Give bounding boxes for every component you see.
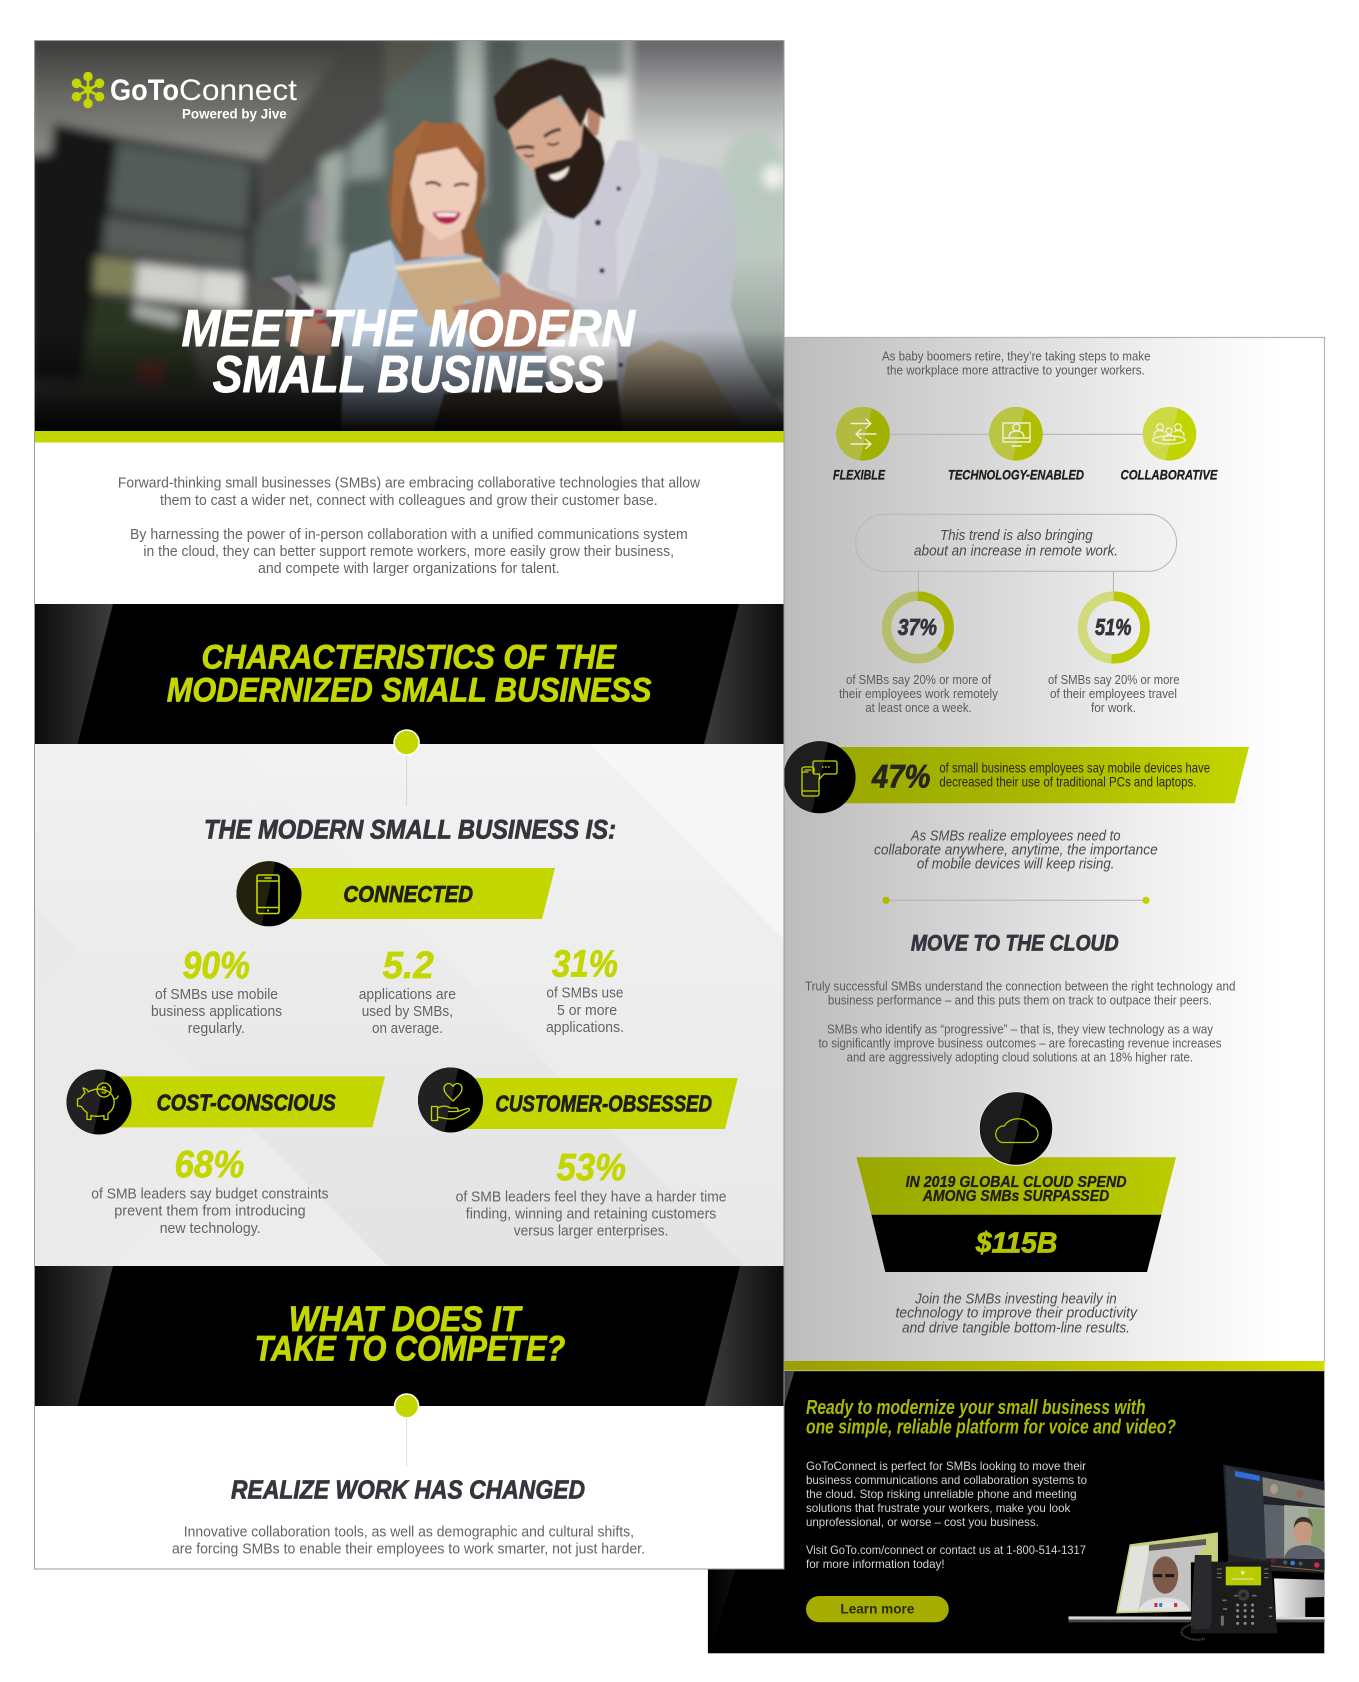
icon: smartphone xyxy=(236,861,302,926)
text: introduction: in the cloud, they can better support remote workers, more easily grow their business, xyxy=(143,543,674,560)
stat: 5.2: applications are xyxy=(359,986,456,1003)
stat: 5.2: on average. xyxy=(372,1020,443,1037)
stat: 5.2: used by SMBs, xyxy=(362,1003,453,1020)
divider with dots xyxy=(882,897,1150,904)
icon: collaborative xyxy=(1142,407,1196,461)
text: call to action body: unprofessional, or worse – cost you business. xyxy=(806,1515,1039,1529)
woman hair xyxy=(387,123,487,262)
chart: 51% donut xyxy=(1082,571,1145,659)
accent bar: right column xyxy=(783,1361,1324,1371)
logo: GoToConnect: Powered by Jive xyxy=(182,105,287,121)
illustration: monitor, laptop and desk phone xyxy=(1068,1464,1330,1640)
icon: hand holding heart xyxy=(418,1068,483,1132)
heading: move to the cloud: MOVE TO THE CLOUD xyxy=(911,931,1119,956)
text: join the SMBs: and drive tangible bottom-line results. xyxy=(902,1320,1130,1337)
icon: technology-enabled xyxy=(989,407,1043,461)
stat: 31%: 31% xyxy=(552,944,618,986)
stat: 31%: applications. xyxy=(546,1019,624,1036)
labels: workplace traits: FLEXIBLE xyxy=(833,467,886,482)
stat: 2019 cloud spend: $115B xyxy=(975,1228,1057,1260)
intro text: baby boomers: As baby boomers retire, they’re taking steps to make xyxy=(882,350,1151,364)
text: 37% caption: at least once a week. xyxy=(865,701,972,715)
text: 37% caption: of SMBs say 20% or more of xyxy=(846,673,991,687)
stat: 90%: of SMBs use mobile xyxy=(155,986,278,1003)
photo: blurred office background xyxy=(27,33,791,453)
banner: 47% mobile devices xyxy=(784,741,1249,814)
text: introduction: and compete with larger organizations for talent. xyxy=(258,560,560,577)
text: introduction xyxy=(118,474,700,577)
heading: the modern small business is: THE MODERN SMALL BUSINESS IS: xyxy=(204,815,616,845)
stat: 68%: 68% xyxy=(174,1144,244,1186)
banner: cost-conscious: COST-CONSCIOUS xyxy=(157,1090,336,1116)
banner: cost-conscious xyxy=(66,1070,385,1134)
banner: 47% mobile devices: of small business employees say mobile devices have xyxy=(939,760,1210,776)
man jacket xyxy=(527,158,784,422)
text: cloud paragraphs: Truly successful SMBs understand the connection between the right technology and xyxy=(805,980,1235,994)
stat: 53%: versus larger enterprises. xyxy=(514,1222,668,1240)
text: introduction: By harnessing the power of in-person collaboration with a unified communications system xyxy=(130,526,688,543)
stat: 68%: new technology. xyxy=(160,1220,261,1237)
text: realize work has changed: Innovative collaboration tools, as well as demographic and cultural shifts, xyxy=(184,1524,634,1541)
text: 51% caption xyxy=(1048,673,1180,715)
text: call to action body: business communications and collaboration systems to xyxy=(806,1473,1087,1487)
tablet xyxy=(394,258,508,327)
labels: workplace traits: COLLABORATIVE xyxy=(1120,467,1218,482)
stat: 5.2: 5.2 xyxy=(383,945,434,987)
text: 37% caption: their employees work remotely xyxy=(839,687,999,701)
chart: 37% donut: 37% xyxy=(898,614,937,640)
diagram: three workplace traits xyxy=(836,407,1196,461)
text: introduction: Forward-thinking small businesses (SMBs) are embracing collaborative technologies that allow xyxy=(118,474,700,492)
labels: workplace traits xyxy=(833,467,1218,482)
banner: characteristics heading: CHARACTERISTICS OF THE xyxy=(202,639,617,677)
callout: remote work trend: This trend is also bringing xyxy=(940,527,1093,544)
man trousers xyxy=(620,340,734,418)
text: cloud paragraphs: and are aggressively adopting cloud solutions at an 18% higher rate. xyxy=(847,1051,1193,1065)
panel: right column background xyxy=(783,338,1324,1362)
man hand xyxy=(452,273,576,352)
text: 51% caption: of their employees travel xyxy=(1050,687,1177,701)
text: cloud paragraphs: to significantly improve business outcomes – are forecasting revenue increases xyxy=(818,1037,1222,1051)
stat: 31% xyxy=(546,944,624,1036)
text: mobile devices statement: As SMBs realize employees need to xyxy=(910,828,1120,845)
button: learn more xyxy=(806,1596,949,1622)
stat: 90%: business applications xyxy=(151,1003,282,1020)
accent bar: hero xyxy=(34,431,784,442)
icon: piggy bank: $ xyxy=(101,1086,107,1096)
banner: characteristics heading xyxy=(34,604,784,744)
photo: dark gradient overlay xyxy=(34,40,784,432)
text: cloud paragraphs xyxy=(805,980,1235,1065)
panel: hero photo xyxy=(27,33,794,453)
stat: 53% xyxy=(456,1147,726,1240)
stat: 90% xyxy=(151,945,282,1037)
banner: what does it take to compete: TAKE TO COMPETE? xyxy=(255,1330,565,1369)
stat: 53%: finding, winning and retaining customers xyxy=(466,1206,716,1222)
banner: customer-obsessed: CUSTOMER-OBSESSED xyxy=(495,1090,712,1116)
banner: customer-obsessed xyxy=(418,1068,738,1132)
intro text: baby boomers xyxy=(882,350,1151,378)
title: SMALL BUSINESS xyxy=(213,346,605,404)
stat: 2019 cloud spend xyxy=(856,1085,1176,1272)
chart: 51% donut: 51% xyxy=(1095,614,1131,640)
text: call to action body: the cloud. Stop risking unreliable phone and meeting xyxy=(806,1487,1077,1501)
panel: left column white background xyxy=(34,40,784,1569)
stat: 90%: regularly. xyxy=(188,1020,245,1037)
text: join the SMBs: technology to improve their productivity xyxy=(896,1305,1138,1322)
stat: 68%: of SMB leaders say budget constraints xyxy=(91,1186,329,1202)
text: mobile devices statement: collaborate anywhere, anytime, the importance xyxy=(874,842,1158,859)
text: 51% caption: of SMBs say 20% or more xyxy=(1048,673,1180,687)
banner: connected xyxy=(236,861,555,926)
panel: call to action xyxy=(708,1371,1330,1654)
man hair, face and beard xyxy=(507,95,592,183)
text: introduction: them to cast a wider net, connect with colleagues and grow their customer base. xyxy=(160,492,658,509)
text: 37% caption xyxy=(839,673,999,715)
intro text: baby boomers: the workplace more attractive to younger workers. xyxy=(887,364,1145,378)
banner: what does it take to compete: WHAT DOES IT xyxy=(289,1300,523,1339)
icon: phone with chat bubble xyxy=(784,741,856,814)
labels: workplace traits: TECHNOLOGY-ENABLED xyxy=(948,467,1084,482)
logo: GoToConnect xyxy=(72,72,298,121)
woman blouse and arm xyxy=(341,240,550,428)
text: call to action body xyxy=(806,1459,1087,1571)
heading: realize work has changed: REALIZE WORK HAS CHANGED xyxy=(231,1474,585,1504)
stat: 53%: of SMB leaders feel they have a harder time xyxy=(456,1188,726,1205)
text: 51% caption: for work. xyxy=(1091,701,1136,715)
stat: 31%: 5 or more xyxy=(557,1002,617,1019)
text: cloud paragraphs: business performance – and this puts them on track to outpace their peers. xyxy=(828,994,1212,1008)
photo: two people with a tablet xyxy=(271,58,794,440)
stat: 2019 cloud spend: AMONG SMBs SURPASSED xyxy=(922,1188,1110,1205)
banner: 47% mobile devices: decreased their use of traditional PCs and laptops. xyxy=(939,774,1196,790)
marker: dot and line xyxy=(395,1394,419,1466)
callout: remote work trend xyxy=(856,514,1177,571)
text: cloud paragraphs: SMBs who identify as “progressive” – that is, they view technology as a way xyxy=(827,1023,1214,1037)
stat: 68% xyxy=(91,1144,329,1237)
heading: call to action: one simple, reliable platform for voice and video? xyxy=(806,1416,1176,1438)
logo: GoToConnect: GoTo xyxy=(110,74,179,107)
callout: remote work trend: about an increase in remote work. xyxy=(914,542,1118,559)
stat: 2019 cloud spend: IN 2019 GLOBAL CLOUD SPEND xyxy=(906,1174,1127,1191)
text: call to action body: for more information today! xyxy=(806,1557,945,1571)
stat: 31%: of SMBs use xyxy=(546,985,624,1002)
icon: piggy bank xyxy=(66,1070,132,1134)
panel: characteristics background xyxy=(34,744,784,1266)
title: MEET THE MODERN xyxy=(182,300,636,358)
banner: what does it take to compete xyxy=(34,1266,784,1406)
text: call to action body: Visit GoTo.com/connect or contact us at 1-800-514-1317 xyxy=(806,1543,1086,1557)
stat: 90%: 90% xyxy=(183,945,250,987)
icon: cloud xyxy=(978,1092,1052,1166)
stat: 5.2 xyxy=(359,945,456,1037)
heading: call to action: Ready to modernize your small business with xyxy=(806,1397,1146,1419)
heading: call to action xyxy=(806,1397,1176,1438)
button: learn more: Learn more xyxy=(840,1602,915,1617)
text: join the SMBs xyxy=(896,1291,1138,1337)
woman face xyxy=(421,227,464,258)
title xyxy=(182,300,636,404)
marker: dot and line xyxy=(394,730,419,806)
stat: 68%: prevent them from introducing xyxy=(114,1203,306,1220)
banner: 47% mobile devices: 47% xyxy=(871,759,930,795)
banner: characteristics heading: MODERNIZED SMALL BUSINESS xyxy=(167,671,652,709)
text: join the SMBs: Join the SMBs investing heavily in xyxy=(914,1291,1117,1308)
banner: connected: CONNECTED xyxy=(343,881,473,907)
text: mobile devices statement xyxy=(874,828,1158,873)
text: call to action body: solutions that frustrate your workers, make you look xyxy=(806,1501,1071,1515)
logo: GoToConnect: Connect xyxy=(179,74,298,107)
text: realize work has changed xyxy=(172,1524,645,1558)
stat: 53%: 53% xyxy=(557,1147,626,1189)
text: realize work has changed: are forcing SMBs to enable their employees to work smarter, not just harder. xyxy=(172,1540,645,1558)
text: call to action body: GoToConnect is perfect for SMBs looking to move their xyxy=(806,1459,1086,1473)
chart: 37% donut xyxy=(886,571,949,659)
text: mobile devices statement: of mobile devices will keep rising. xyxy=(917,856,1114,873)
icon: logo flower xyxy=(72,72,104,108)
icon: flexible xyxy=(836,407,890,461)
